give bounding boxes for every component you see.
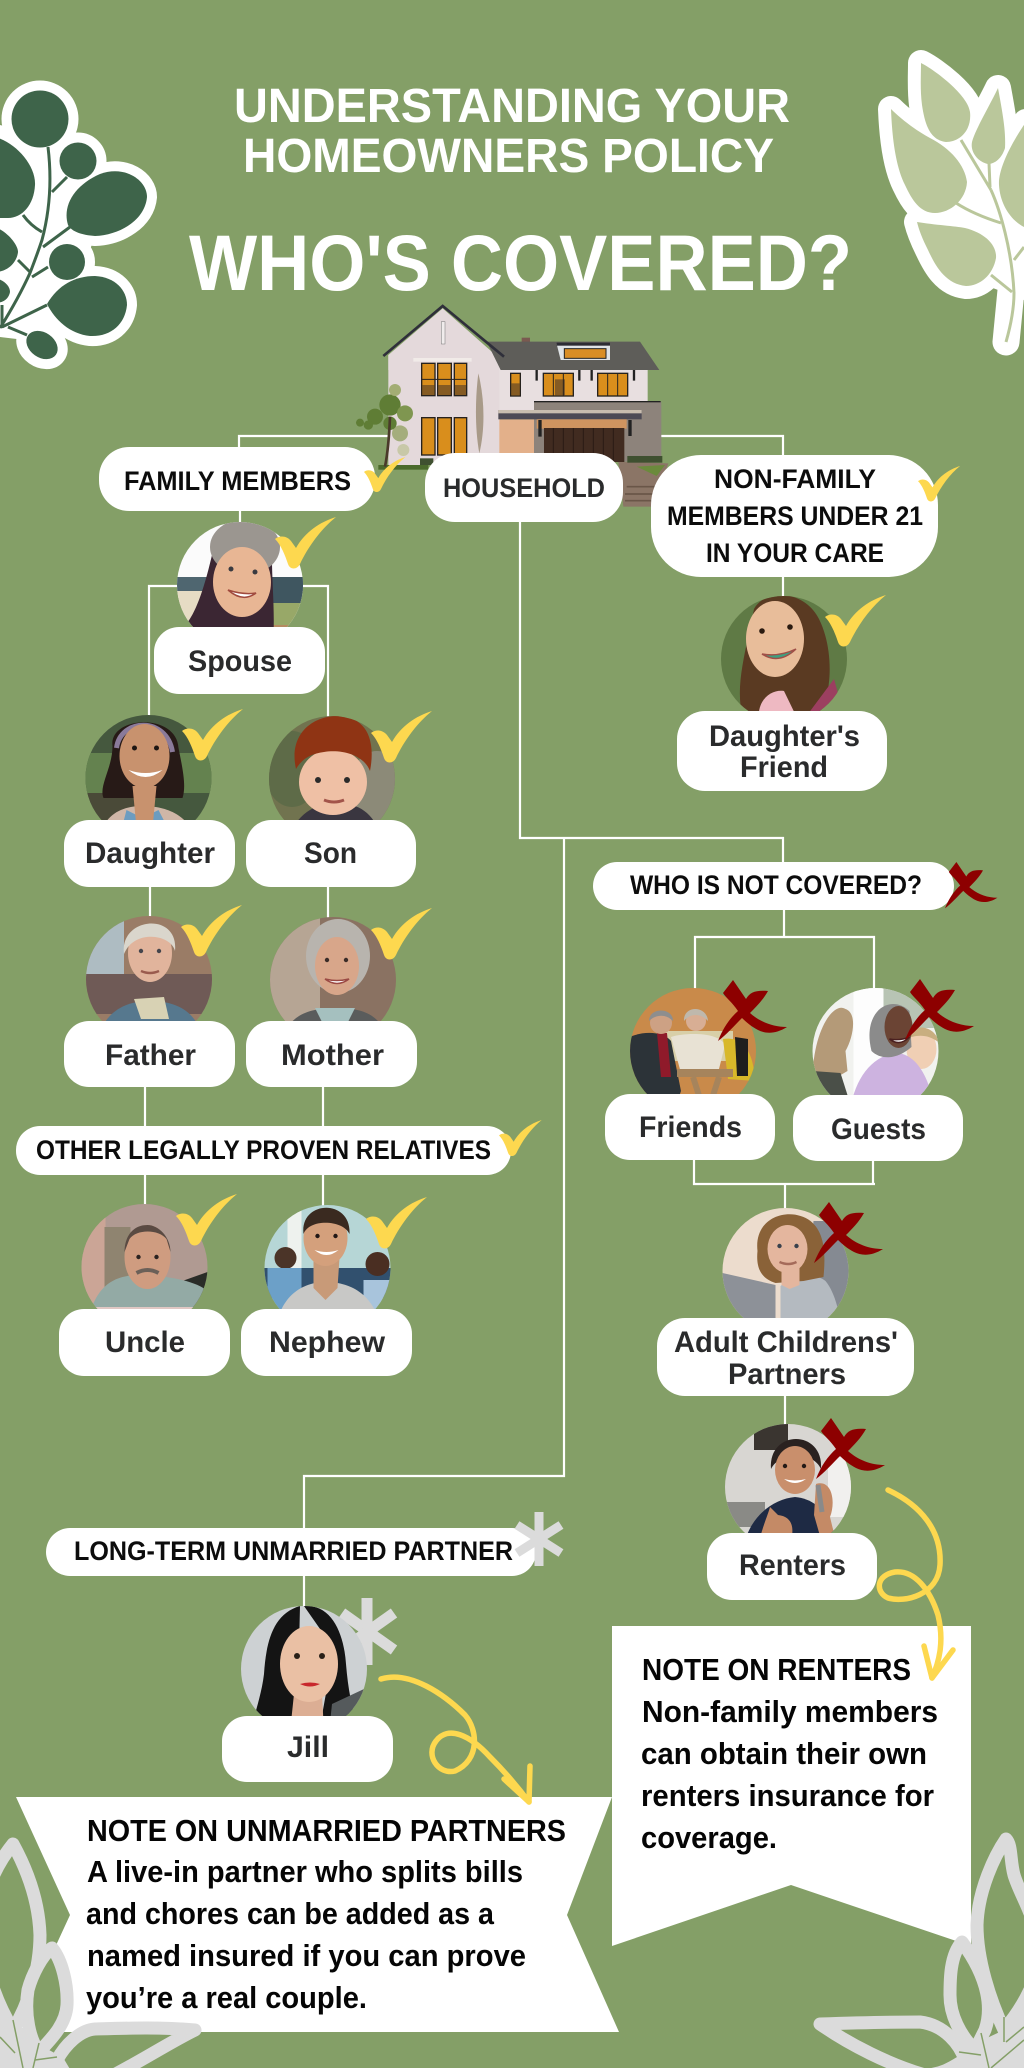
label: nephew: Nephew — [269, 1326, 386, 1359]
callout: note on renters: renters insurance for — [641, 1778, 934, 1813]
label: son — [246, 820, 416, 887]
person: jill — [222, 1598, 394, 1782]
node: other legally proven relatives: OTHER LEGALLY PROVEN RELATIVES — [36, 1135, 491, 1165]
label: father — [64, 1021, 235, 1087]
callout: note on renters: coverage. — [641, 1820, 777, 1855]
node: long-term unmarried partner — [46, 1512, 561, 1576]
photo: daughter's friend — [721, 595, 847, 722]
person: daughter — [64, 709, 243, 887]
photo: friends — [630, 988, 756, 1094]
photo: son — [269, 716, 395, 820]
label: daughter's friend: Friend — [740, 751, 828, 784]
x icon — [814, 1202, 883, 1263]
person: mother — [246, 908, 432, 1087]
node: who is not covered: WHO IS NOT COVERED? — [630, 870, 922, 900]
node: long-term unmarried partner: LONG-TERM UNMARRIED PARTNER — [74, 1536, 513, 1566]
photo: adult childrens' partners — [722, 1208, 848, 1318]
callout: note on unmarried partners — [16, 1797, 619, 2032]
photo: spouse — [177, 522, 303, 627]
person: daughter's friend — [677, 595, 887, 791]
check icon — [181, 905, 242, 956]
person: son — [246, 711, 432, 887]
title: WHO'S COVERED? — [189, 218, 852, 307]
photo: father — [86, 916, 212, 1021]
callout: note on unmarried partners: NOTE ON UNMARRIED PARTNERS — [87, 1813, 566, 1848]
label: renters — [707, 1533, 877, 1600]
node: household: HOUSEHOLD — [443, 473, 605, 503]
label: friends: Friends — [639, 1111, 742, 1144]
callout: note on unmarried partners: named insured if you can prove — [87, 1938, 526, 1973]
label: daughter — [64, 820, 235, 887]
node: non-family members under 21: NON-FAMILY — [714, 464, 876, 494]
connector lines — [145, 436, 875, 1612]
arrow: jill to note — [381, 1677, 530, 1802]
house illustration — [356, 306, 668, 507]
x icon — [905, 979, 974, 1040]
person: uncle — [59, 1194, 237, 1376]
callout: note on renters: NOTE ON RENTERS — [642, 1652, 911, 1687]
title: HOMEOWNERS POLICY — [243, 130, 774, 183]
check icon — [371, 711, 432, 762]
check icon — [176, 1194, 237, 1246]
label: daughter's friend: Daughter's — [709, 720, 860, 753]
check icon — [275, 517, 336, 568]
node: household — [425, 453, 623, 522]
label: friends — [605, 1094, 775, 1160]
label: spouse: Spouse — [188, 645, 292, 678]
label: uncle — [59, 1309, 230, 1376]
label: renters: Renters — [739, 1549, 846, 1582]
check icon — [371, 908, 432, 960]
label: mother: Mother — [281, 1039, 384, 1072]
title: UNDERSTANDING YOUR — [234, 80, 790, 133]
arrow: renters to note — [879, 1490, 953, 1678]
node: who is not covered — [593, 862, 997, 910]
callout: note on renters: can obtain their own — [641, 1736, 927, 1771]
person: renters — [707, 1418, 885, 1600]
label: son: Son — [304, 837, 357, 870]
photo: renters — [725, 1424, 851, 1533]
callout: note on renters: Non-family members — [642, 1694, 938, 1729]
node: non-family members under 21: IN YOUR CARE — [706, 538, 884, 568]
person: friends — [605, 980, 787, 1160]
label: adult childrens' partners: Partners — [728, 1358, 846, 1391]
check icon — [366, 1197, 427, 1248]
node: non-family members under 21 — [651, 455, 960, 577]
person: guests — [793, 979, 974, 1161]
photo: jill — [241, 1606, 367, 1716]
label: uncle: Uncle — [105, 1326, 185, 1359]
label: jill: Jill — [287, 1731, 329, 1764]
person: father — [64, 905, 242, 1087]
person: adult childrens' partners — [657, 1202, 914, 1396]
callout: note on unmarried partners: A live-in partner who splits bills — [87, 1854, 523, 1889]
decorative leaves: light green top right — [891, 63, 1024, 342]
asterisk icon — [342, 1598, 394, 1665]
x icon — [718, 980, 787, 1041]
title — [189, 80, 852, 307]
label: nephew — [241, 1309, 412, 1376]
label: adult childrens' partners — [657, 1318, 914, 1396]
label: daughter: Daughter — [85, 837, 215, 870]
check icon — [182, 709, 243, 760]
check icon — [825, 595, 886, 646]
asterisk icon — [517, 1512, 561, 1566]
node: family members — [99, 447, 405, 511]
label: guests: Guests — [831, 1113, 926, 1146]
label: adult childrens' partners: Adult Childrens' — [674, 1326, 898, 1359]
photo: nephew — [264, 1205, 390, 1309]
node: non-family members under 21: MEMBERS UNDER 21 — [667, 501, 923, 531]
photo: uncle — [82, 1204, 208, 1309]
person: spouse — [154, 517, 336, 694]
decorative plant: grey outline bottom left — [0, 1844, 195, 2068]
label: father: Father — [105, 1039, 196, 1072]
label: daughter's friend — [677, 711, 887, 791]
decorative leaves: dark green top left — [0, 90, 147, 365]
label: spouse — [154, 627, 325, 694]
photo: mother — [270, 917, 396, 1021]
label: guests — [793, 1095, 963, 1161]
label: jill — [222, 1716, 393, 1782]
person: nephew — [241, 1197, 427, 1376]
node: family members: FAMILY MEMBERS — [124, 466, 351, 496]
photo: daughter — [86, 715, 212, 820]
x icon — [816, 1418, 885, 1479]
callout: note on renters — [612, 1626, 971, 1946]
callout: note on unmarried partners: and chores can be added as a — [86, 1896, 495, 1931]
decorative plant: grey outline bottom right — [820, 1839, 1024, 2068]
label: mother — [246, 1021, 417, 1087]
photo: guests — [812, 988, 938, 1095]
node: other legally proven relatives — [16, 1120, 542, 1175]
callout: note on unmarried partners: you’re a real couple. — [86, 1980, 367, 2015]
